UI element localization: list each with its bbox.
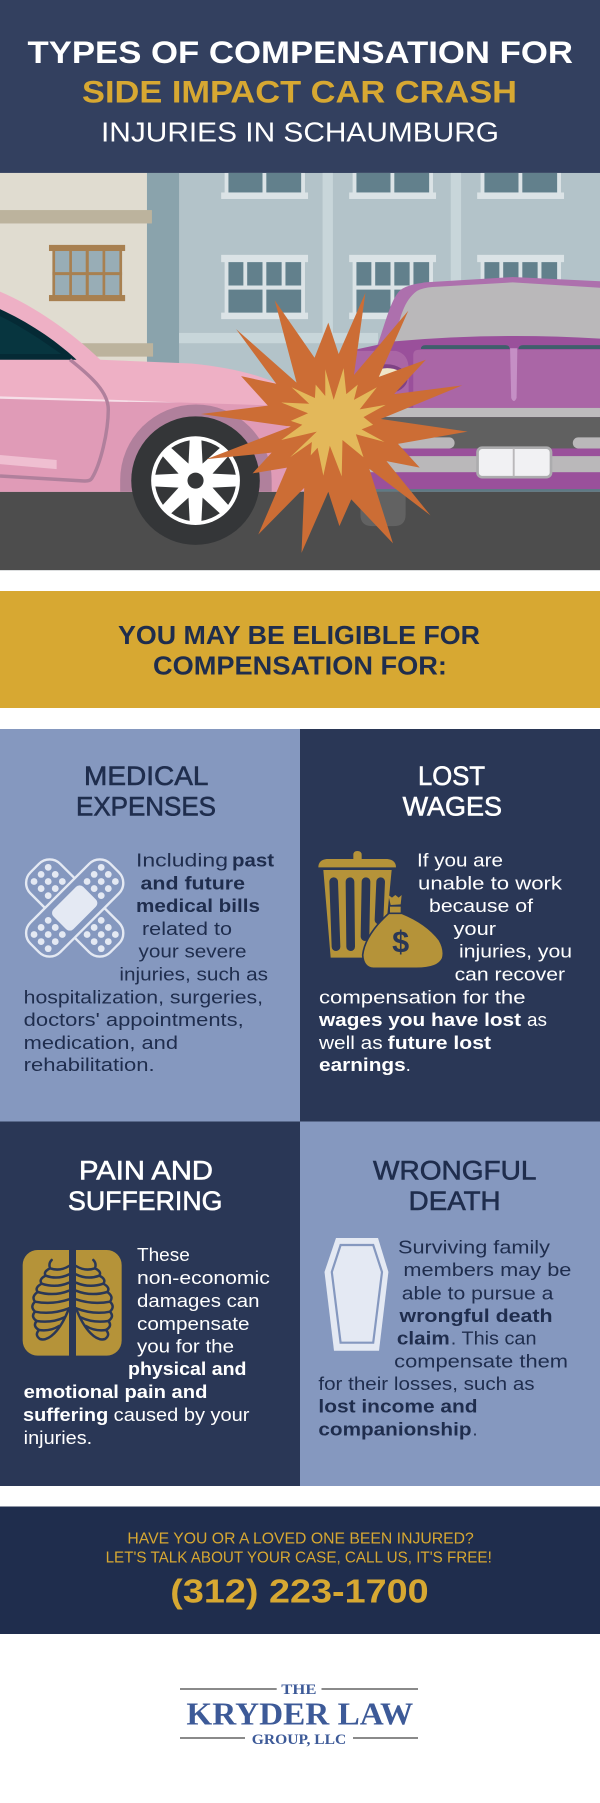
body text: wrongful death: lost income and [318,1397,478,1417]
title line 1: TYPES OF COMPENSATION FOR [28,34,573,70]
purple car [344,277,600,526]
body text: lost wages: because of [429,896,534,916]
body text: medical expenses [24,850,274,1075]
heading: medical expenses [76,761,216,822]
body text: medical expenses: injuries, such as [119,964,268,984]
body text: pain and suffering: physical and [128,1359,246,1379]
body text: lost wages: unable to work [418,873,563,893]
heading: medical expenses: EXPENSES [76,792,216,822]
call to action text [106,1530,492,1566]
body text: wrongful death: for their losses, such as [318,1374,535,1394]
heading: pain and suffering [68,1155,222,1216]
body text: lost wages: . [406,1055,411,1075]
call to action text: LET'S TALK ABOUT YOUR CASE, CALL US, IT'S FREE! [106,1549,492,1566]
logo: The Kryder Law Group, LLC: GROUP, LLC [252,1732,346,1748]
banner text [118,620,480,680]
banner text: COMPENSATION FOR: [153,650,447,680]
pink car [0,292,310,492]
body text: wrongful death: . This can [451,1328,536,1348]
body text: pain and suffering: damages can [137,1291,260,1311]
heading: pain and suffering: SUFFERING [68,1186,222,1216]
body text: lost wages: future lost [388,1033,491,1053]
heading: pain and suffering: PAIN AND [79,1155,213,1185]
body text: lost wages [318,850,572,1075]
body text: lost wages: earnings [319,1055,406,1075]
call to action text: HAVE YOU OR A LOVED ONE BEEN INJURED? [127,1530,474,1547]
heading: lost wages: WAGES [403,792,502,822]
body text: medical expenses: past [232,850,274,870]
icon: rib cage [23,1249,122,1356]
grey building with windows [179,173,564,343]
body text: medical expenses: medication, and [24,1033,178,1053]
body text: wrongful death: . [472,1420,478,1440]
body text: medical expenses: hospitalization, surgeries, [24,987,263,1007]
logo: The Kryder Law Group, LLC: KRYDER LAW [186,1696,413,1732]
panel: pain and suffering [0,1122,300,1486]
heading: wrongful death: WRONGFUL [373,1155,537,1185]
body text: lost wages: injuries, you [459,942,572,962]
title line 3: INJURIES IN SCHAUMBURG [101,116,499,148]
body text: pain and suffering: compensate [137,1314,250,1334]
body text: wrongful death: compensate them [394,1351,568,1371]
body text: lost wages: as [527,1010,547,1030]
heading: lost wages: LOST [418,761,485,791]
body text: medical expenses: medical bills [136,896,260,916]
body text: pain and suffering: suffering [23,1405,108,1425]
body text: wrongful death: companionship [318,1420,472,1440]
explosion burst [201,293,468,553]
body text: lost wages: can recover [455,964,565,984]
body text: lost wages: your [454,919,496,939]
icon: coffin [324,1238,388,1351]
body text: pain and suffering [23,1245,270,1448]
body text: lost wages: well as [318,1033,383,1053]
phone number: (312) 223-1700 [170,1573,429,1610]
body text: wrongful death [318,1237,571,1440]
icon: trash can and money bag: $ [392,925,409,959]
body text: lost wages: compensation for the [319,987,526,1007]
icon: crossed bandages [20,853,130,963]
logo: The Kryder Law Group, LLC: THE [281,1682,316,1698]
icon: trash can and money bag [318,851,443,968]
body text: pain and suffering: injuries. [24,1428,92,1448]
header panel with title [0,0,600,173]
body text: wrongful death: claim [397,1328,450,1348]
body text: wrongful death: Surviving family [398,1237,550,1257]
body text: lost wages: wages you have lost [318,1010,521,1030]
body text: medical expenses: doctors' appointments, [24,1010,244,1030]
beige building [0,173,179,364]
heading: medical expenses: MEDICAL [84,761,209,791]
title line 2: SIDE IMPACT CAR CRASH [82,74,517,110]
heading: wrongful death [373,1155,537,1216]
heading: lost wages [403,761,502,822]
panel: wrongful death [300,1122,600,1486]
body text: wrongful death: able to pursue a [402,1283,555,1303]
body text: pain and suffering: These [137,1245,190,1265]
body text: pain and suffering: you for the [137,1336,234,1356]
heading: wrongful death: DEATH [409,1186,501,1216]
body text: wrongful death: wrongful death [398,1306,553,1326]
panel: lost wages [300,729,600,1122]
gold eligibility banner [0,591,600,708]
body text: lost wages: If you are [417,850,503,870]
body text: medical expenses: related to [142,919,232,939]
illustration: side impact car crash [0,173,600,570]
body text: medical expenses: rehabilitation. [24,1055,155,1075]
body text: medical expenses: and future [140,873,245,893]
body text: pain and suffering: caused by your [114,1405,250,1425]
road [0,492,600,570]
logo: The Kryder Law Group, LLC [180,1682,418,1748]
body text: pain and suffering: non-economic [137,1268,270,1288]
body text: wrongful death: members may be [403,1260,571,1280]
body text: pain and suffering: emotional pain and [24,1382,207,1402]
panel: medical expenses [0,729,300,1122]
body text: medical expenses: Including [136,850,228,870]
banner text: YOU MAY BE ELIGIBLE FOR [118,620,480,650]
wheel [131,416,260,545]
body text: medical expenses: your severe [138,942,246,962]
call to action banner [0,1506,600,1634]
